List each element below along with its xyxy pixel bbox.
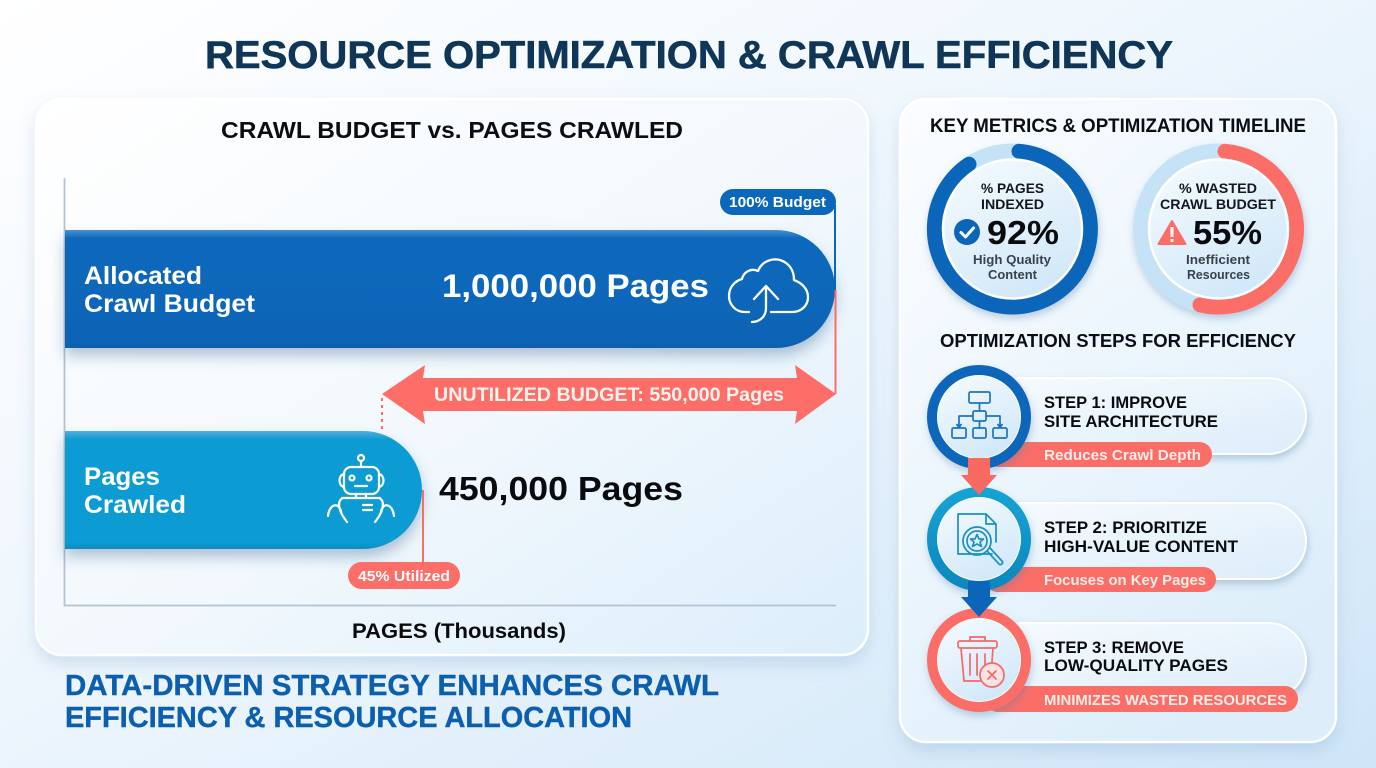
step 2: STEP 2: PRIORITIZE <box>1044 518 1207 537</box>
step 3 <box>932 613 1306 712</box>
panel: crawl budget chart <box>36 99 868 655</box>
step 3: STEP 3: REMOVE <box>1044 638 1184 657</box>
donut: pages indexed: % PAGES <box>981 180 1044 196</box>
bar: pages crawled <box>65 431 422 549</box>
donut: wasted crawl budget <box>1140 151 1297 307</box>
icon: warning <box>1158 221 1186 244</box>
step 1: STEP 1: IMPROVE <box>1044 393 1187 412</box>
donut: pages indexed: INDEXED <box>981 196 1044 212</box>
label: 100% budget <box>720 189 836 290</box>
step 3: LOW-QUALITY PAGES <box>1044 656 1228 675</box>
arrow: unutilized budget: UNUTILIZED BUDGET: 550,000 Pages <box>434 385 784 406</box>
donut: pages indexed <box>934 151 1090 307</box>
value: 450,000 pages: 450,000 Pages <box>439 470 683 507</box>
label: 45% utilized: 45% Utilized <box>358 569 450 585</box>
arrow: step 1 to step 2 <box>961 458 997 495</box>
metrics heading: KEY METRICS & OPTIMIZATION TIMELINE <box>930 116 1306 137</box>
donut: wasted crawl budget: % WASTED <box>1179 180 1257 196</box>
step 1 <box>932 370 1306 467</box>
donut: wasted crawl budget: Resources <box>1187 267 1250 282</box>
step 2 <box>932 492 1306 592</box>
icon: site hierarchy <box>952 392 1007 438</box>
bar: allocated crawl budget: Crawl Budget <box>84 290 256 318</box>
icon: cloud upload <box>729 259 808 322</box>
label: 45% utilized <box>348 490 460 589</box>
takeaway text: EFFICIENCY & RESOURCE ALLOCATION <box>65 702 632 734</box>
axis label: PAGES (Thousands) <box>352 620 566 643</box>
donut: pages indexed: Content <box>988 267 1038 282</box>
step 2: HIGH-VALUE CONTENT <box>1044 537 1239 556</box>
donut: pages indexed: 92% <box>987 214 1059 251</box>
step 1: Reduces Crawl Depth <box>1044 448 1201 464</box>
panel: key metrics and timeline <box>900 99 1336 742</box>
title: RESOURCE OPTIMIZATION & CRAWL EFFICIENCY <box>205 34 1173 77</box>
icon: document search <box>958 514 1003 565</box>
donut: wasted crawl budget: Inefficient <box>1186 252 1251 267</box>
donut: wasted crawl budget: 55% <box>1193 214 1262 251</box>
bar: allocated crawl budget: Allocated <box>84 262 202 290</box>
step 3: MINIMIZES WASTED RESOURCES <box>1044 693 1287 709</box>
takeaway text <box>65 670 719 734</box>
bar: pages crawled: Crawled <box>84 491 186 519</box>
takeaway text: DATA-DRIVEN STRATEGY ENHANCES CRAWL <box>65 670 719 702</box>
bar: allocated crawl budget <box>65 230 835 348</box>
chart heading: CRAWL BUDGET vs. PAGES CRAWLED <box>221 117 683 143</box>
donut: wasted crawl budget: CRAWL BUDGET <box>1160 196 1276 212</box>
icon: trash with x <box>958 637 1004 687</box>
label: 100% budget: 100% Budget <box>729 195 826 211</box>
chart axes <box>64 178 836 606</box>
step 1: SITE ARCHITECTURE <box>1044 412 1218 431</box>
steps heading: OPTIMIZATION STEPS FOR EFFICIENCY <box>940 331 1296 351</box>
arrow: step 2 to step 3 <box>961 581 997 617</box>
step 2: Focuses on Key Pages <box>1044 573 1206 589</box>
donut: pages indexed: High Quality <box>973 252 1052 267</box>
arrow: unutilized budget <box>382 290 836 431</box>
icon: check badge <box>954 219 980 245</box>
bar: allocated crawl budget: 1,000,000 Pages <box>442 268 709 304</box>
icon: robot <box>328 455 394 522</box>
bar: pages crawled: Pages <box>84 463 160 491</box>
